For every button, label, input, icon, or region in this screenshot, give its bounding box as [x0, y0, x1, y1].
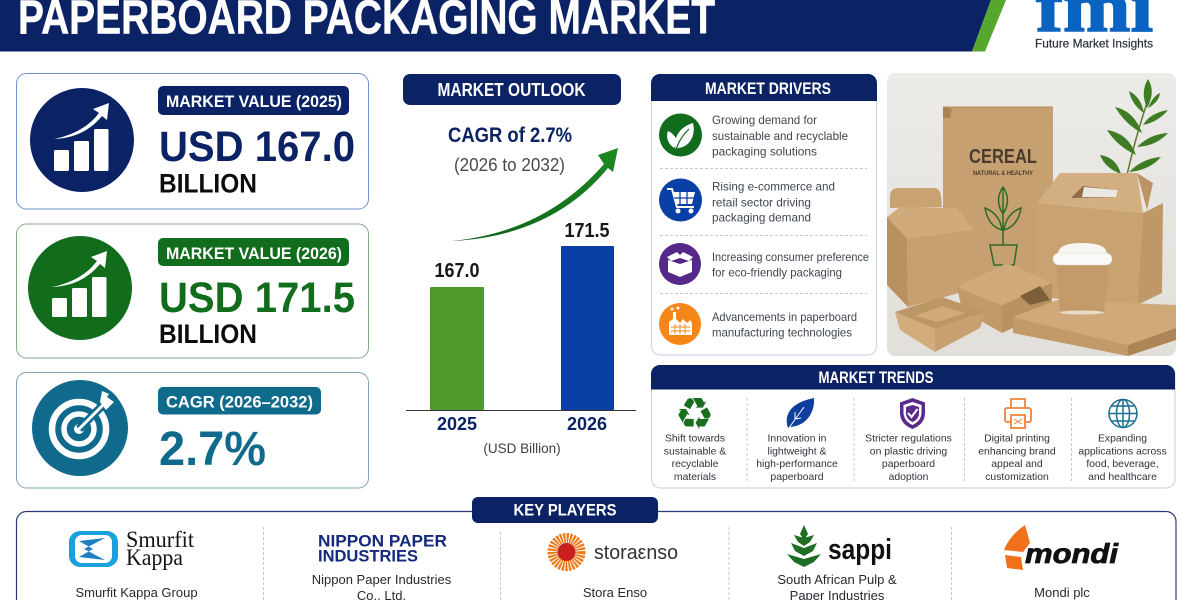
player: Stora Enso: storaεnso [594, 542, 678, 564]
trend: regulations: paperboard [882, 459, 935, 470]
label pill [158, 238, 349, 266]
left carry box [887, 188, 974, 307]
trend: lightweight: Innovation in [768, 434, 827, 444]
player: Smurfit Kappa [69, 527, 198, 600]
driver: manufacturing [659, 303, 857, 345]
driver: e-commerce: retail sector driving [712, 196, 811, 210]
value: USD 171.5 [159, 274, 355, 322]
player: Sappi [777, 525, 897, 600]
unit: BILLION [159, 168, 257, 198]
cereal box: NATURAL & HEALTHY [973, 170, 1034, 177]
label pill: CAGR (2026–2032) [166, 394, 313, 412]
trend: digital printing: customization [985, 472, 1049, 483]
player: Smurfit Kappa: Smurfit [126, 527, 195, 552]
panel: market outlook [403, 74, 636, 456]
panel: market drivers [651, 74, 877, 355]
trend: applications [1078, 400, 1167, 483]
trend: recyclable [664, 389, 726, 483]
trend: digital printing: enhancing brand [978, 446, 1056, 458]
trend: applications: and healthcare [1088, 472, 1157, 483]
trend: lightweight: lightweight & [768, 446, 827, 458]
heading: MARKET DRIVERS [705, 79, 831, 98]
driver: e-commerce [659, 178, 835, 224]
tray [895, 297, 985, 352]
driver: e-commerce: packaging demand [712, 210, 811, 224]
label pill: MARKET VALUE (2026) [166, 245, 342, 263]
label pill [158, 86, 349, 115]
bar chart: 2025 [437, 414, 477, 434]
CAGR text: (2026 to 2032) [454, 155, 565, 175]
trend: regulations: adoption [889, 472, 929, 483]
player: Stora Enso [552, 538, 678, 600]
trend: recyclable: ♻ [675, 389, 714, 440]
trend: regulations [865, 398, 952, 483]
heading [651, 365, 1175, 390]
trend: recyclable: sustainable & [664, 446, 726, 458]
growth arrow [452, 148, 618, 241]
right carry box [1037, 173, 1163, 305]
panel: market trends [651, 365, 1175, 488]
icon: growth chart green [28, 236, 132, 340]
logo: Future Market Insights: Future Market Insights [1035, 36, 1153, 50]
driver: manufacturing: manufacturing technologies [712, 326, 852, 340]
label pill: MARKET VALUE (2025) [166, 93, 342, 111]
small open box [957, 263, 1052, 333]
panel: market value 2026 [16, 224, 368, 358]
trend: digital printing: appeal and [991, 459, 1043, 470]
trend: applications: Expanding [1098, 434, 1147, 444]
bar chart: 167.0 [434, 260, 480, 282]
cereal box: CEREAL [969, 146, 1037, 168]
panel: CAGR [16, 372, 368, 488]
player: Stora Enso: Stora Enso [583, 585, 647, 600]
player: Mondi [1004, 525, 1119, 600]
CAGR text: CAGR of 2.7% [448, 123, 572, 147]
heading [472, 497, 658, 523]
driver: sustainable: packaging solutions [712, 144, 817, 158]
cereal box [943, 107, 1053, 290]
heading: KEY PLAYERS [514, 502, 616, 520]
heading [403, 74, 621, 105]
trend: regulations: Stricter regulations [865, 434, 952, 444]
trend: regulations: on plastic driving [870, 446, 947, 458]
trend: applications: applications across [1078, 446, 1167, 458]
player: Smurfit Kappa: Smurfit Kappa Group [75, 585, 198, 600]
driver: manufacturing: Advancements in paperboard [712, 310, 857, 324]
player: Smurfit Kappa: Kappa [126, 545, 183, 570]
driver: sustainable: Growing demand for [712, 113, 817, 127]
player: Mondi: mondi [1025, 538, 1119, 569]
trend: lightweight [756, 398, 838, 483]
trend: recyclable: Shift towards [665, 434, 725, 444]
trend: lightweight: high-performance [756, 459, 838, 470]
trend: digital printing [978, 399, 1056, 483]
trend: recyclable: materials [674, 472, 716, 483]
driver: sustainable [659, 113, 848, 158]
plant [1100, 79, 1168, 175]
heading: MARKET OUTLOOK [438, 80, 586, 100]
player: Sappi: South African Pulp & [777, 572, 897, 587]
heading [651, 74, 877, 101]
driver: eco-friendly: Increasing consumer preference [712, 250, 869, 264]
driver: e-commerce: Rising e-commerce and [712, 180, 835, 194]
trend: applications: food, beverage, [1086, 459, 1159, 470]
heading: MARKET TRENDS [818, 369, 934, 387]
player: Mondi: Mondi plc [1034, 585, 1090, 600]
header banner [0, 0, 1006, 52]
driver: eco-friendly [659, 243, 869, 285]
trend: digital printing: Digital printing [984, 434, 1050, 444]
icon: target [32, 380, 128, 476]
bar chart: (USD Billion) [483, 441, 561, 456]
trend: recyclable: recyclable [672, 459, 719, 470]
player: Nippon Paper: NIPPON PAPER [318, 532, 447, 550]
player: Nippon Paper: INDUSTRIES [318, 546, 418, 566]
driver: eco-friendly: for eco-friendly packaging [712, 266, 842, 280]
trend: lightweight: paperboard [770, 472, 824, 483]
bar chart: 2026 [567, 414, 607, 434]
value: 2.7% [159, 423, 266, 476]
label pill [158, 387, 321, 414]
player: Nippon Paper [312, 532, 452, 600]
player: Sappi: sappi [828, 534, 892, 566]
paper cup [1053, 243, 1112, 314]
panel: market value 2025 [16, 74, 368, 209]
driver: sustainable: sustainable and recyclable [712, 129, 848, 143]
icon: growth chart navy [30, 88, 134, 192]
bar chart [406, 220, 636, 456]
CAGR text [448, 123, 572, 175]
player: Nippon Paper: Nippon Paper Industries [312, 572, 452, 587]
unit: BILLION [159, 319, 257, 349]
panel: product photo [887, 73, 1176, 356]
value: USD 167.0 [159, 123, 355, 171]
panel: key players [16, 497, 1176, 600]
bar chart: 171.5 [564, 220, 610, 242]
flat box [1013, 300, 1176, 356]
